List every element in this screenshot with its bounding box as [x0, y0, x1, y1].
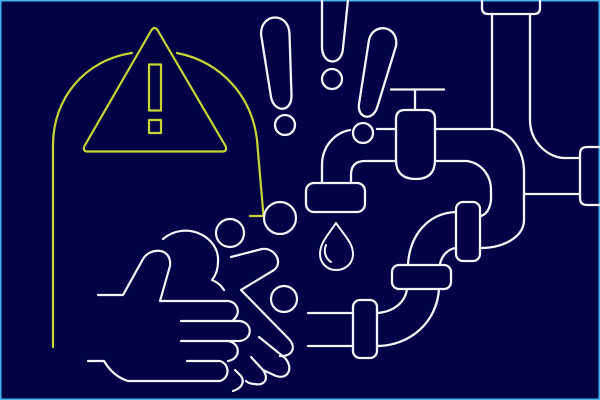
- front hand: [98, 251, 238, 321]
- vertical pipe and elbow: [492, 14, 579, 194]
- upper pipe run: [435, 129, 524, 248]
- icon: warning triangle with arch: [53, 28, 264, 347]
- tap spout: [322, 129, 396, 183]
- icon: washing hands and bubbles: [88, 202, 297, 391]
- back hand: [231, 249, 293, 356]
- pipes and tap: [306, 0, 600, 358]
- tap handle: [391, 90, 444, 110]
- valve body: [396, 110, 435, 179]
- bubbles: [216, 219, 244, 247]
- icon: exclamation marks: [261, 0, 396, 143]
- collars: [456, 202, 480, 261]
- lower pipe run: [308, 212, 456, 346]
- icon: water drop: [320, 223, 353, 270]
- soap foam: [163, 231, 224, 290]
